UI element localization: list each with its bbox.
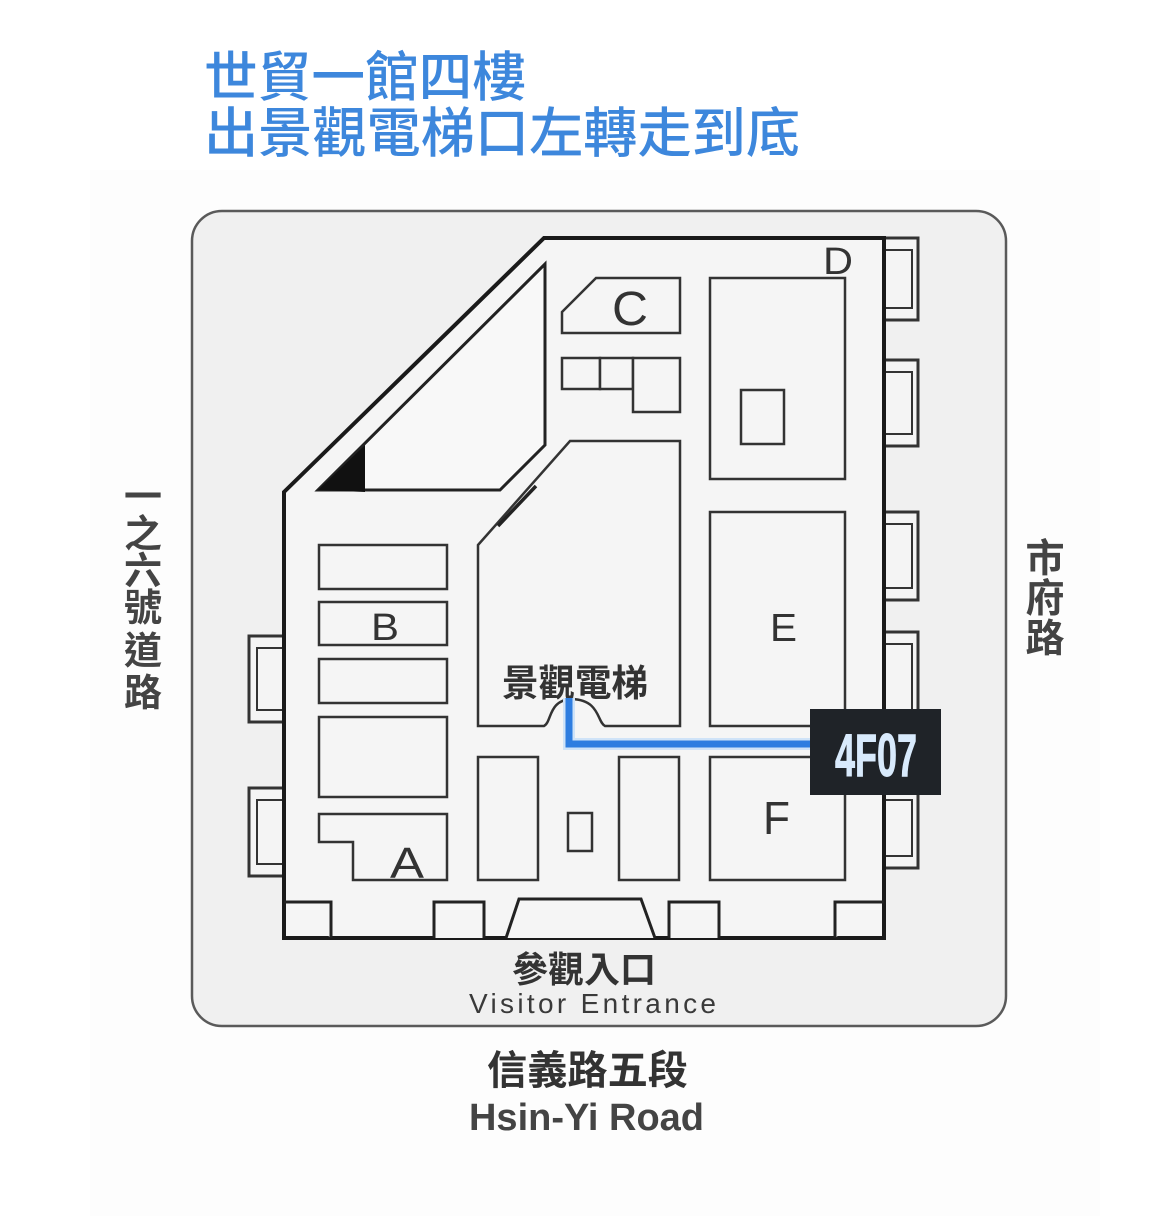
shop B group: B (371, 607, 399, 649)
visitor entrance label (469, 949, 716, 1019)
road label: west: 路 (124, 673, 162, 715)
road label: south: 信義路五段 (487, 1049, 688, 1093)
road label: west: 之 (124, 514, 162, 556)
shop F: F (763, 792, 790, 844)
road label: west: 一 (124, 477, 162, 519)
black corner triangle (318, 445, 365, 492)
site boundary panel (192, 211, 1006, 1026)
right side protrusions (884, 238, 918, 868)
shop E: E (770, 607, 797, 650)
road label: west (124, 477, 162, 715)
small rooms near C (562, 358, 680, 412)
4F07 label (810, 709, 941, 795)
road label: west: 六 (124, 551, 162, 593)
visitor entrance label: 參觀入口 (512, 949, 656, 990)
road label: east (1025, 538, 1065, 661)
road label: west: 道 (124, 631, 162, 673)
road label: east: 市 (1025, 538, 1065, 581)
road label: west: 號 (124, 588, 162, 630)
title: 世貿一館四樓 (204, 48, 526, 108)
north-west triangular void (318, 264, 545, 490)
central hall with elevator bump (478, 441, 680, 726)
title (204, 48, 800, 164)
shop D block: D (823, 241, 853, 283)
entrance notches (284, 899, 884, 938)
road label: east: 路 (1025, 618, 1065, 661)
shop F (710, 757, 845, 880)
shop C: C (612, 283, 648, 336)
shop E (710, 512, 845, 726)
south blocks (478, 757, 679, 880)
left side protrusions (249, 636, 285, 876)
shop D block (710, 241, 853, 479)
visitor entrance label: Visitor Entrance (469, 988, 716, 1019)
shop A (319, 814, 447, 888)
elevator label: 景觀電梯 (502, 663, 648, 704)
shop B group (319, 545, 447, 797)
shop C (562, 278, 680, 336)
road label: east: 府 (1025, 578, 1065, 621)
road label: south: Hsin-Yi Road (469, 1097, 704, 1139)
building outline (284, 238, 884, 938)
floor plan map (192, 211, 1006, 1026)
shop A: A (390, 839, 425, 888)
diagonal corridor stroke (498, 486, 536, 526)
4F07 label: 4F07 (835, 722, 917, 789)
title: 出景觀電梯口左轉走到底 (204, 104, 800, 164)
walking route (569, 698, 812, 744)
road label: south (469, 1049, 704, 1139)
